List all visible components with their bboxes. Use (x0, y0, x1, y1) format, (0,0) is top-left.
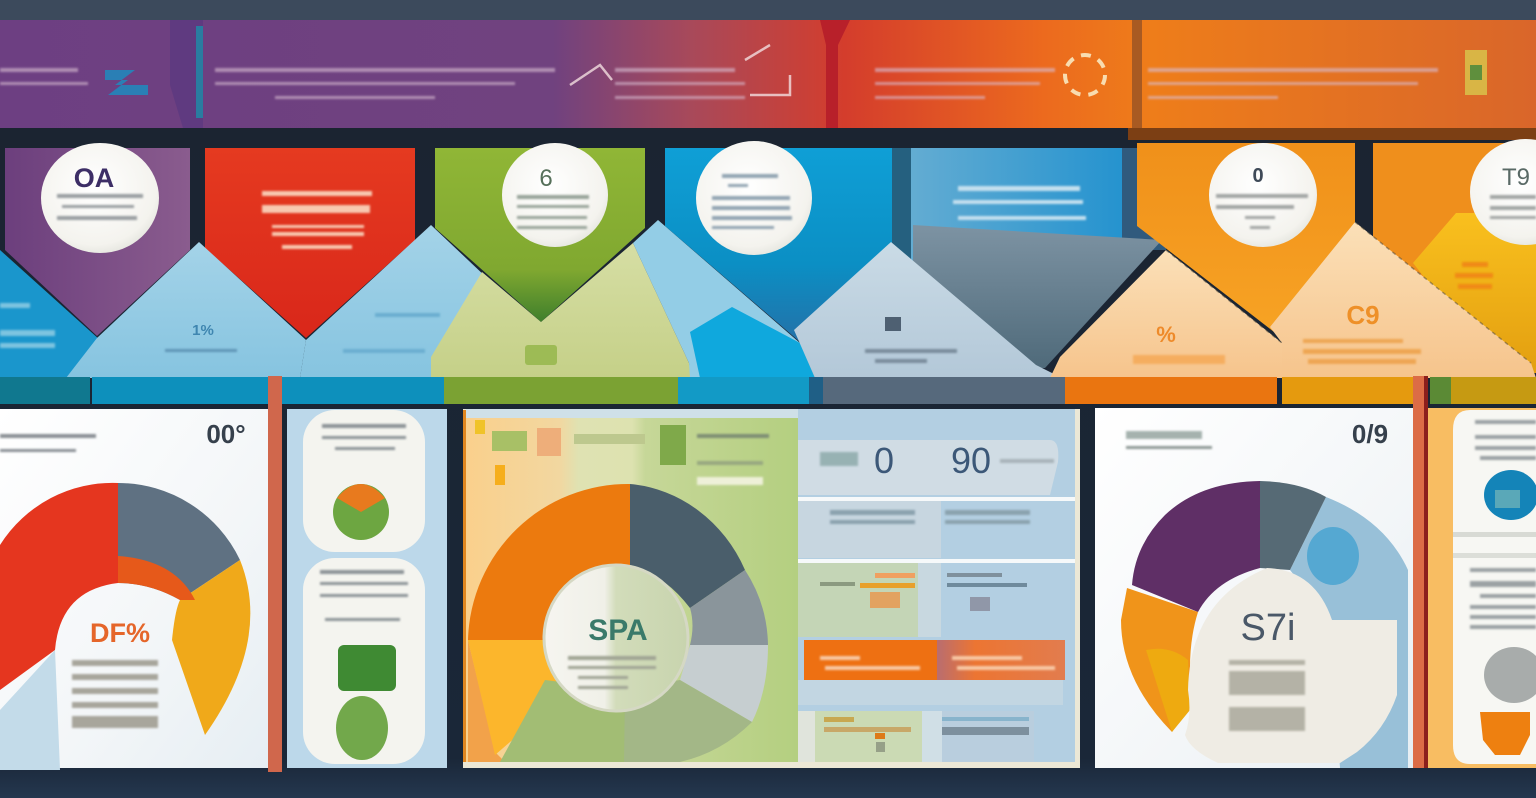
stat: row 2 (798, 500, 941, 558)
donut chart: DF% (90, 618, 150, 648)
bubble: 0 (1209, 143, 1317, 247)
bubble: 6 (502, 143, 608, 247)
band: row base (0, 377, 90, 404)
panel: right donut: 0/9 (1352, 419, 1388, 449)
donut center (544, 565, 688, 711)
triangle: blue (633, 220, 815, 378)
triangle captions: 1% (192, 322, 214, 339)
panel: left list (287, 409, 447, 768)
bubble: 0: 0 (1252, 165, 1264, 187)
vertical rule left (268, 376, 282, 772)
top banner (0, 20, 1536, 128)
icon: orange green ball (333, 484, 389, 540)
triangle: grey (794, 242, 1062, 378)
donut chart (1121, 481, 1408, 768)
panel: right donut (1095, 408, 1413, 768)
shield: red (205, 148, 415, 338)
panel: center (463, 409, 1080, 768)
shield: orange right (1373, 143, 1536, 373)
triangle: peach 2 (1270, 222, 1536, 378)
triangle: light green (431, 243, 692, 378)
shield: grey inner (913, 225, 1162, 368)
icon: green basket (338, 645, 396, 691)
banner divider center (820, 20, 850, 128)
bubble: 6: 6 (539, 165, 553, 192)
icon: blue circle (1484, 470, 1536, 520)
row of shields (0, 139, 1536, 404)
row of shields: % (1156, 322, 1176, 347)
shield: green (435, 148, 645, 322)
donut chart: center: SPA (588, 614, 648, 647)
stat: pale band (798, 680, 1063, 705)
bubble: blue (696, 141, 812, 255)
stat: bottom cards (798, 711, 815, 762)
donut chart: S7i (1241, 607, 1295, 649)
legend top left (475, 420, 485, 434)
card: bottom (303, 558, 425, 764)
stat: row 3 (798, 563, 1027, 637)
vertical rule right (1413, 376, 1428, 768)
donut chart (0, 483, 250, 770)
icon: green ball (336, 696, 388, 760)
banner divider right (1132, 20, 1142, 128)
triangle: peach 1 (1050, 250, 1282, 378)
banner divider left (170, 20, 203, 128)
panel: left donut: 00° (206, 419, 246, 449)
panel: center: 0 (874, 440, 894, 481)
shield captions (262, 191, 372, 249)
triangle: left blue (0, 250, 100, 378)
stat: orange bar (804, 640, 937, 680)
panel: center: 90 (951, 440, 991, 481)
triangle: light blue 2 (300, 225, 505, 378)
row of shields: C9 (1346, 300, 1380, 330)
icon: grey cloud and orange bowl (1484, 647, 1536, 703)
bubble: right: T9 (1502, 164, 1530, 191)
panel: far right (1428, 408, 1536, 768)
donut chart: center (468, 484, 768, 762)
banner text lines (0, 68, 1438, 99)
yellow shield caption (1455, 262, 1493, 289)
panel: steel blue (911, 148, 1122, 268)
banner icons (105, 70, 148, 95)
panel: left donut (0, 409, 268, 770)
triangle: light blue 1 (66, 242, 306, 378)
shield: orange (1137, 143, 1355, 332)
shield: purple (5, 148, 190, 336)
bubble: right (1470, 139, 1536, 245)
bubble: OA: OA (74, 163, 114, 193)
stat: pill (798, 440, 1058, 495)
shield: blue (665, 148, 892, 342)
card: top (303, 410, 425, 552)
bubble: OA (41, 143, 159, 253)
column gaps (892, 148, 913, 263)
